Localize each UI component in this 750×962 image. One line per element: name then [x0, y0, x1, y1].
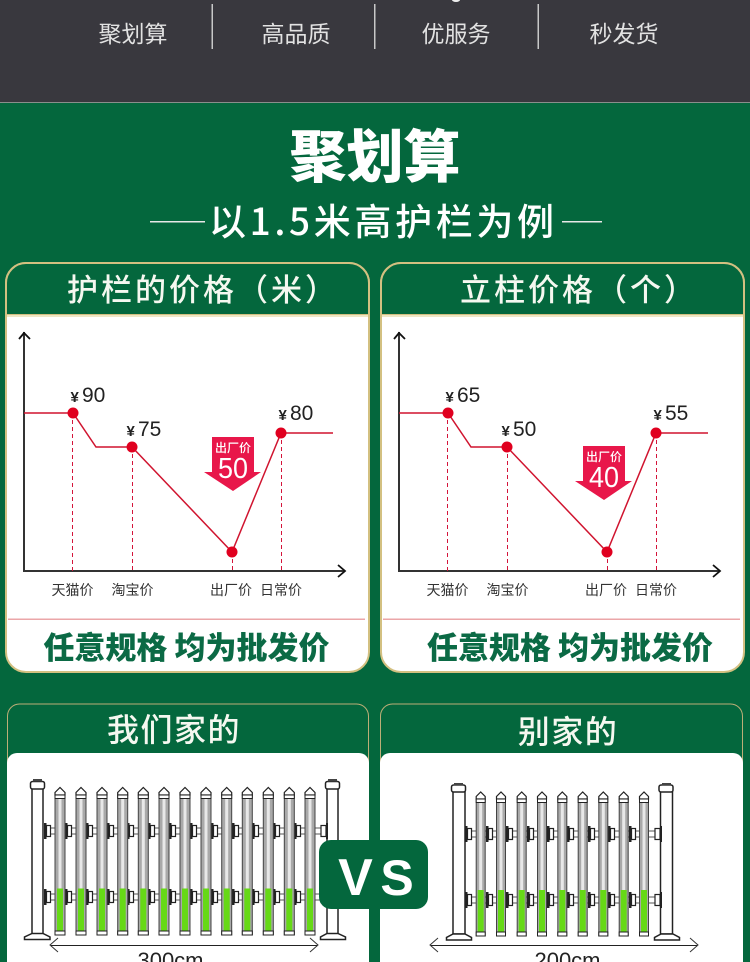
top navigation bar: 聚划算 [98, 15, 168, 49]
VS badge: V [338, 849, 373, 907]
top navigation bar: 秒发货 [590, 15, 658, 49]
line chart: post price: 55 [665, 402, 688, 425]
VS badge: S [380, 850, 414, 906]
top navigation bar: 高品质 [262, 15, 330, 49]
factory price arrow: 50 [204, 437, 261, 491]
line chart: railing price [19, 332, 345, 600]
fence illustration: 300cm [24, 779, 346, 940]
line chart: post price: ¥ [446, 389, 454, 406]
line chart: post price: ¥ [502, 423, 510, 440]
main title: 聚划算 [290, 112, 460, 194]
line chart: railing price: 出厂价 [210, 580, 252, 600]
heading: our fence: 我们家的 [107, 705, 241, 751]
panel: our fence [7, 704, 369, 962]
VS badge [319, 840, 428, 909]
panel: post price [381, 263, 744, 672]
panel: railing price [6, 263, 369, 672]
line chart: railing price: ¥ [126, 423, 136, 440]
line chart: post price: 淘宝价 [486, 580, 528, 600]
line chart: railing price: 日常价 [260, 580, 302, 600]
factory price arrow: 50: 50 [218, 453, 248, 485]
line chart: railing price: 75 [138, 418, 161, 441]
heading: railing price: 护栏的价格（米） [67, 265, 339, 310]
heading: post price: 立柱价格（个） [460, 265, 698, 310]
factory price arrow: 40: 40 [589, 462, 619, 494]
slogan: 任意规格 均为批发价 [427, 623, 713, 668]
subtitle: 以1.5米高护栏为例 [209, 192, 554, 246]
line chart: railing price: 90 [82, 384, 105, 407]
dimension arrow: 300cm [50, 938, 318, 962]
slogan: 任意规格 均为批发价 [43, 623, 330, 668]
line chart: railing price: ¥ [70, 389, 80, 406]
factory price arrow: 40: 出厂价 [586, 448, 622, 465]
line chart: railing price: ¥ [278, 407, 288, 424]
factory price arrow: 50: 出厂价 [215, 439, 251, 456]
fence illustration: 200cm [446, 783, 680, 940]
line chart: post price: 日常价 [635, 580, 677, 600]
line chart: railing price: 淘宝价 [112, 580, 154, 600]
top navigation bar [0, 0, 750, 103]
dimension arrow: 200cm [430, 938, 698, 962]
factory price arrow: 40 [575, 446, 632, 500]
top navigation bar: 优服务 [422, 15, 490, 49]
line chart: post price: 天猫价 [426, 580, 468, 600]
line chart: post price: 出厂价 [585, 580, 627, 600]
line chart: post price: 65 [457, 384, 480, 407]
line chart: railing price: 80 [290, 402, 313, 425]
heading: others' fence: 别家的 [518, 707, 618, 753]
line chart: railing price: 天猫价 [52, 580, 94, 600]
line chart: post price: ¥ [654, 407, 662, 424]
line chart: post price [394, 332, 720, 600]
panel: others' fence [380, 704, 743, 962]
line chart: post price: 50 [513, 418, 536, 441]
